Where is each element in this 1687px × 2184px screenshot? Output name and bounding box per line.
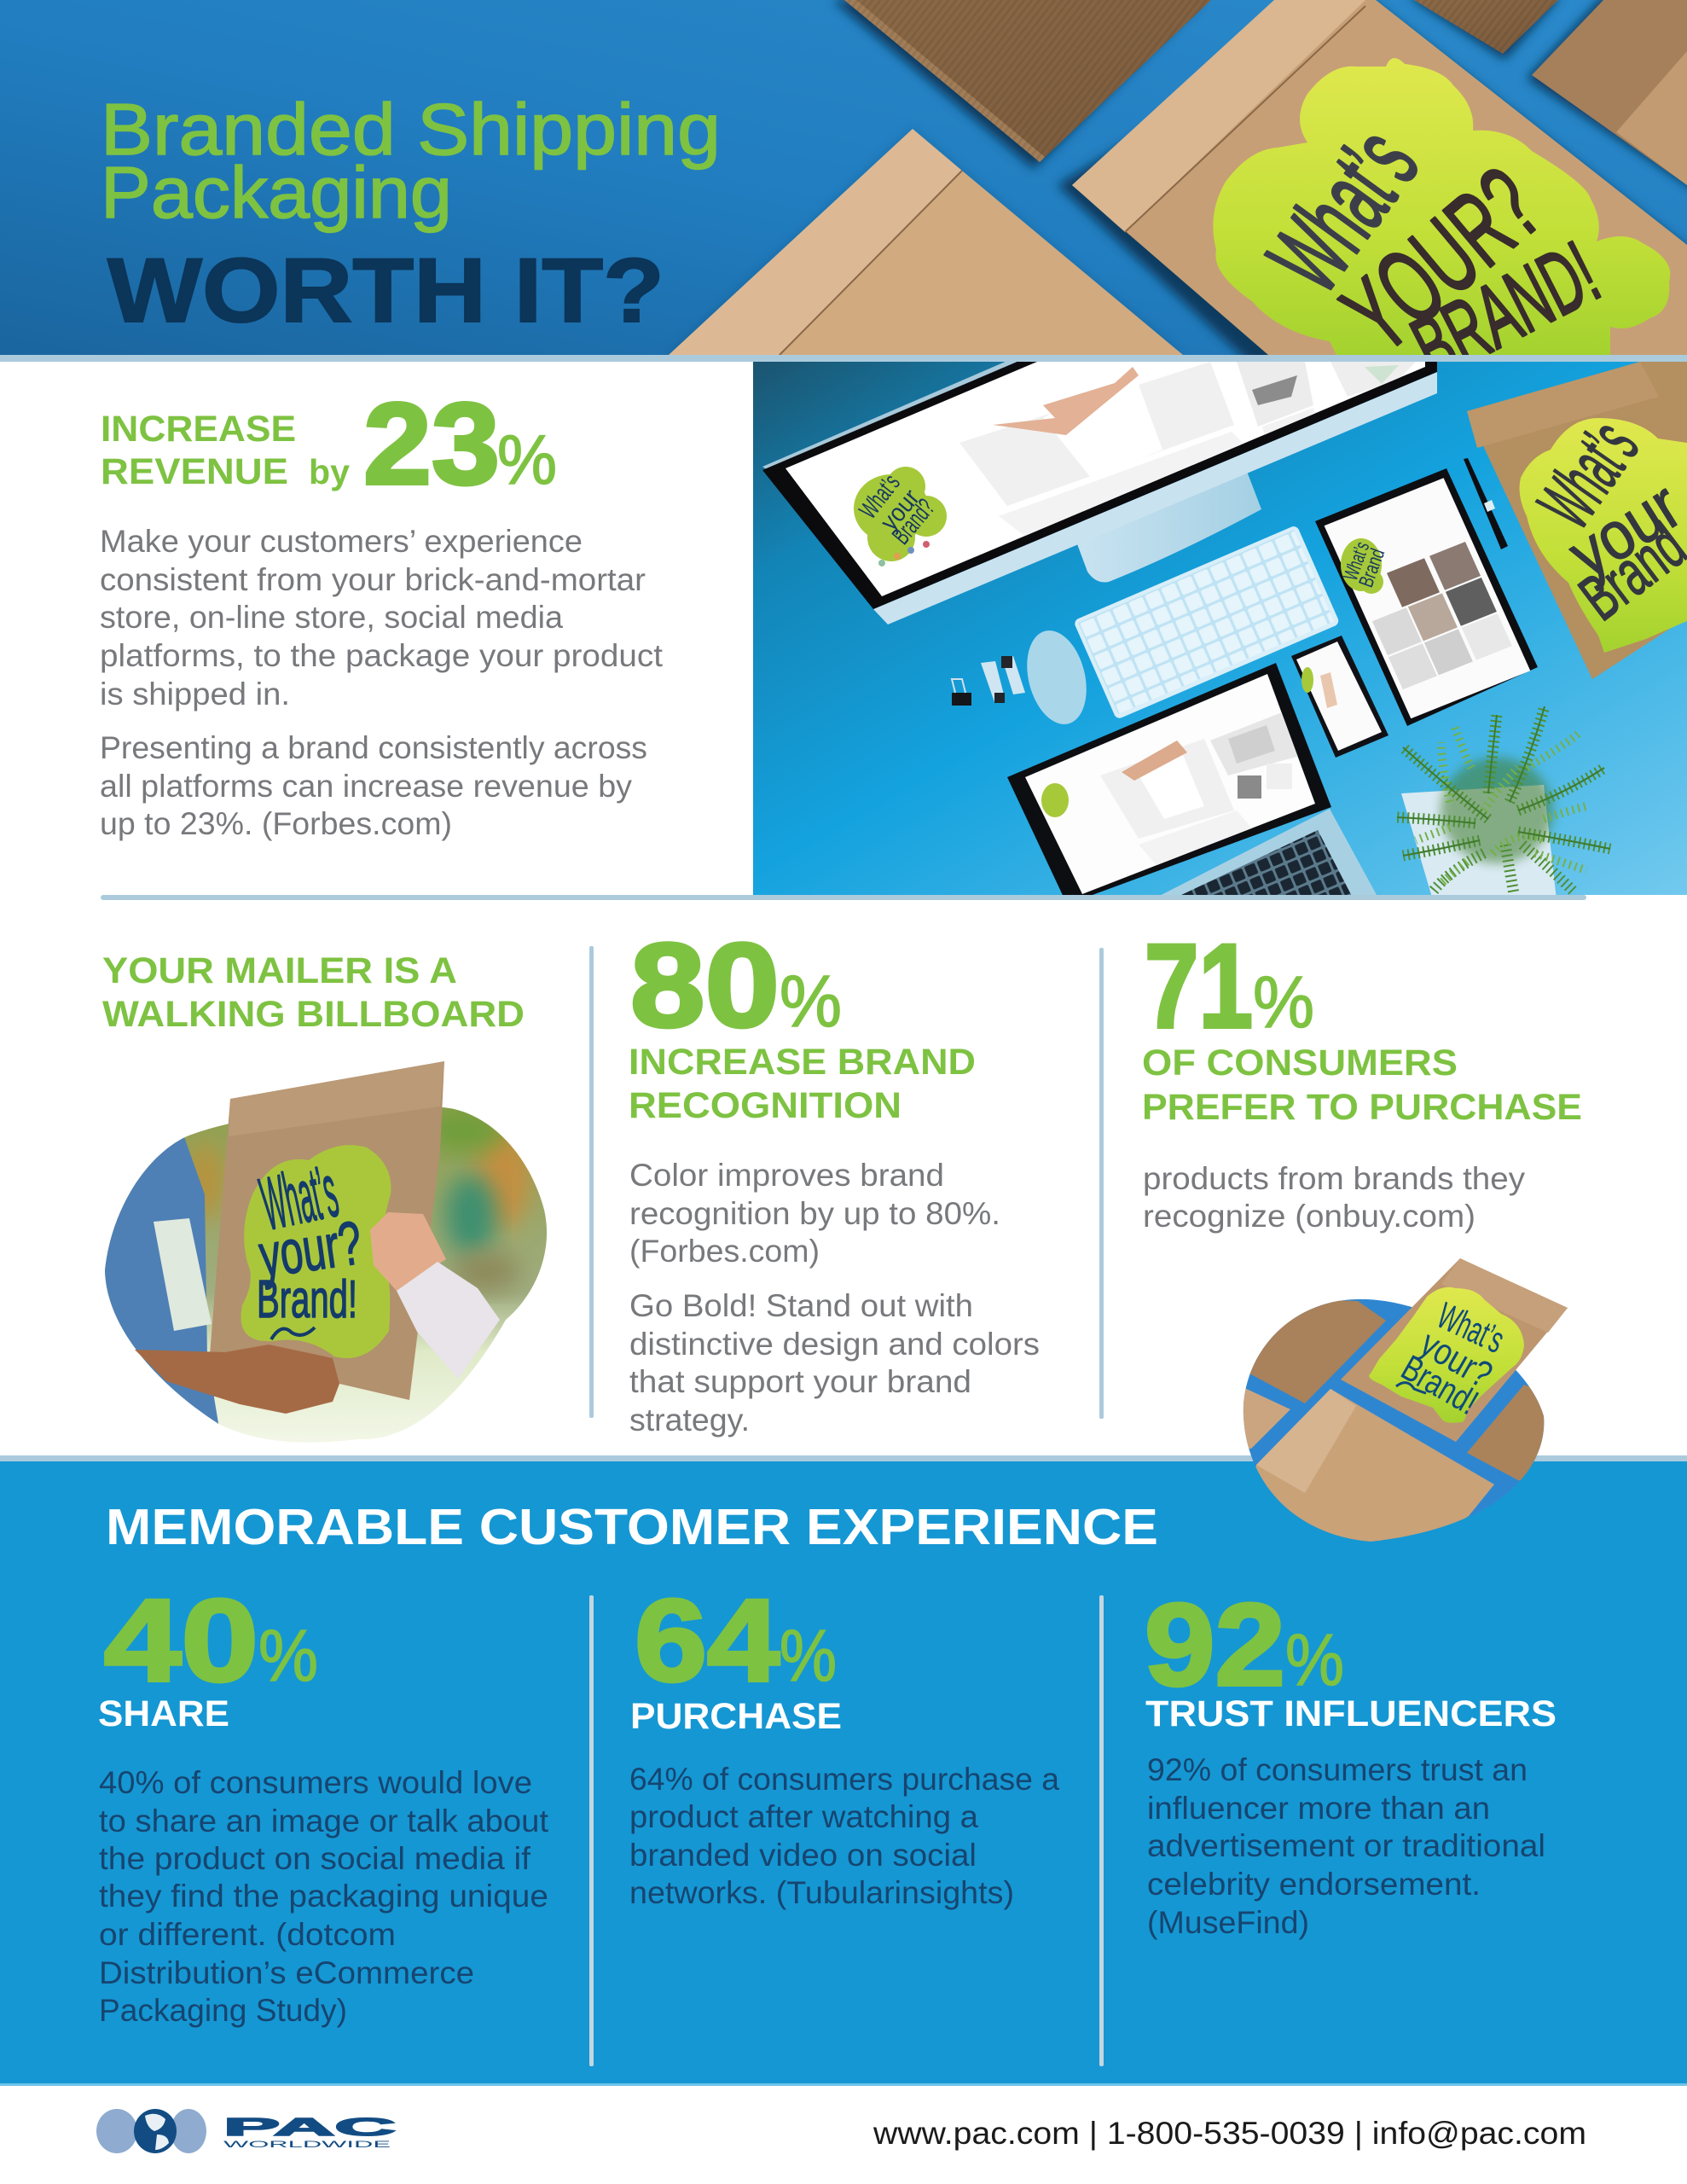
stat: 64% purchase: 64% of consumers purchase a <box>629 1762 1059 1797</box>
heading: increase revenue by 23%: 23 <box>363 379 500 508</box>
title: Branded Shipping Packaging <box>101 90 721 234</box>
stat: 80% brand recognition: that support your brand <box>629 1364 971 1399</box>
heading: memorable customer experience: MEMORABLE CUSTOMER EXPERIENCE <box>106 1499 1158 1555</box>
photo: devices on blue desk <box>753 361 1687 904</box>
icon: tablet <box>1315 468 1538 726</box>
stat: 64% purchase: 64 <box>635 1576 780 1706</box>
stat: 40% share: 40% of consumers would love <box>99 1765 532 1800</box>
stat: 80% brand recognition: recognition by up to 80%. <box>629 1196 1000 1231</box>
icon: lime brand blob with lettering <box>1213 58 1670 355</box>
icon: brand blob on mailer: What’s <box>253 1147 345 1246</box>
icon: small brand blob on monitor: Brand? <box>887 494 941 549</box>
heading: increase revenue by 23%: INCREASE <box>101 409 296 450</box>
text block: revenue copy: Presenting a brand consistently across <box>100 730 647 765</box>
heading: increase revenue by 23%: REVENUE <box>101 451 288 492</box>
icon: small brand blob on monitor: What’s <box>855 469 906 524</box>
stat: 64% purchase: branded video on social <box>629 1838 977 1873</box>
text block: revenue copy: consistent from your brick-and-mortar <box>100 562 646 597</box>
stat: 40% share: they find the packaging unique <box>99 1879 548 1914</box>
stat: 71% of consumers: 71 <box>1145 919 1253 1053</box>
text block: revenue copy: all platforms can increase revenue by <box>100 769 633 804</box>
stat: 80% brand recognition: distinctive design and colors <box>629 1327 1040 1362</box>
stat: 80% brand recognition: % <box>780 961 842 1043</box>
stat: 71% of consumers: % <box>1253 962 1314 1043</box>
divider <box>101 895 1586 900</box>
text block: revenue copy: store, on-line store, social media <box>100 600 563 635</box>
stat: 40% share <box>98 1576 549 2028</box>
heading: your mailer is a walking billboard: YOUR MAILER IS A <box>102 950 457 991</box>
icon: laptop <box>1007 663 1382 904</box>
column divider <box>1099 948 1104 1419</box>
stat: 80% brand recognition: INCREASE BRAND <box>629 1042 976 1083</box>
text block: revenue copy <box>100 524 664 841</box>
stat: 64% purchase: networks. (Tubularinsights) <box>629 1875 1014 1910</box>
icon: phone <box>1291 636 1388 758</box>
heading: increase revenue by 23% <box>101 379 557 508</box>
stat: 40% share: SHARE <box>98 1693 229 1734</box>
icon: small brand blob <box>1369 1287 1524 1423</box>
icon: keyboard <box>1073 525 1340 720</box>
icon: blob on tablet: Brand <box>1354 546 1389 590</box>
photo: mailers in blob <box>1244 1258 1568 1542</box>
text block: revenue copy: up to 23%. (Forbes.com) <box>100 806 452 841</box>
stat: 92% trust influencers: advertisement or traditional <box>1147 1828 1545 1863</box>
stat: 80% brand recognition: (Forbes.com) <box>629 1234 820 1269</box>
logo: PAC Worldwide: WORLDWIDE <box>223 2140 391 2150</box>
header banner with kraft mailers <box>0 0 1687 355</box>
icon: brand blob on mailer: Brand! <box>257 1270 357 1329</box>
icon: potted plant <box>1397 706 1610 900</box>
column divider <box>589 1595 594 2066</box>
icon: blob on tablet <box>1341 538 1385 594</box>
stat: 71% of consumers: recognize (onbuy.com) <box>1143 1199 1475 1234</box>
title: Branded Shipping Packaging: Packaging <box>101 153 452 234</box>
icon: small brand blob: your? <box>1413 1322 1499 1397</box>
stat: 92% trust influencers: influencer more than an <box>1147 1791 1490 1826</box>
stat: 40% share: 40 <box>104 1576 258 1706</box>
heading: increase revenue by 23%: by <box>309 452 350 491</box>
stat: 92% trust influencers: 92 <box>1145 1580 1285 1711</box>
stat: 40% share: to share an image or talk about <box>99 1804 549 1838</box>
stat: 80% brand recognition <box>629 918 1040 1438</box>
stat: 80% brand recognition: Go Bold! Stand out with <box>629 1288 973 1323</box>
text block: revenue copy: Make your customers’ experience <box>100 524 583 559</box>
icon: lime brand blob with lettering: YOUR? <box>1322 147 1562 375</box>
icon: brand blob on mailer: your? <box>255 1209 366 1291</box>
column divider <box>589 946 594 1418</box>
stat: 40% share: Packaging Study) <box>99 1993 347 2028</box>
text block: revenue copy: is shipped in. <box>100 677 290 712</box>
stat: 92% trust influencers: TRUST INFLUENCERS <box>1145 1693 1557 1734</box>
stat: 71% of consumers <box>1142 919 1582 1234</box>
photo: hand-off of branded mailer <box>85 1061 554 1450</box>
receiving hand and sleeve <box>370 1212 500 1379</box>
stat: 80% brand recognition: strategy. <box>629 1403 750 1438</box>
stat: 64% purchase <box>629 1576 1059 1910</box>
title: Worth it: WORTH IT? <box>107 239 664 341</box>
heading: your mailer is a walking billboard <box>102 950 525 1035</box>
logo: PAC Worldwide: PAC <box>223 2114 396 2141</box>
stat: 64% purchase: % <box>780 1616 837 1697</box>
icon: small brand blob: What’s <box>1431 1295 1510 1362</box>
footer contact line: www.pac.com | 1-800-535-0039 | info@pac.com <box>872 2116 1586 2151</box>
text block: revenue copy: platforms, to the package your product <box>100 638 664 673</box>
section band <box>0 1455 1687 1462</box>
stat: 71% of consumers: PREFER TO PURCHASE <box>1142 1087 1582 1128</box>
stat: 64% purchase: PURCHASE <box>630 1696 842 1737</box>
icon: pen <box>1464 458 1508 549</box>
icon: kraft mailer with blob <box>1467 362 1687 679</box>
panel: memorable customer experience <box>0 1461 1687 2086</box>
icon: monitor <box>762 361 1437 624</box>
stat: 92% trust influencers: 92% of consumers trust an <box>1147 1752 1528 1787</box>
stat: 80% brand recognition: 80 <box>630 918 780 1052</box>
column divider <box>1099 1595 1104 2066</box>
heading: increase revenue by 23%: % <box>497 421 557 499</box>
icon: mouse <box>1027 630 1087 724</box>
icon: brand blob on mailer <box>241 1145 391 1358</box>
stat: 40% share: Distribution’s eCommerce <box>99 1955 474 1990</box>
holding hand <box>135 1345 339 1414</box>
stat: 80% brand recognition: Color improves brand <box>629 1158 944 1193</box>
icon: small brand blob on monitor <box>854 467 947 561</box>
title: Branded Shipping Packaging: Branded Shipping <box>101 90 721 171</box>
colour dots <box>878 541 930 566</box>
stat: 92% trust influencers: % <box>1285 1620 1344 1701</box>
icon: small brand blob: Brand! <box>1395 1347 1485 1422</box>
stat: 92% trust influencers: (MuseFind) <box>1147 1905 1309 1940</box>
stat: 64% purchase: product after watching a <box>629 1799 978 1834</box>
stat: 71% of consumers: products from brands they <box>1143 1161 1526 1196</box>
icon: small brand blob on monitor: your <box>875 484 925 536</box>
divider band <box>0 355 1687 362</box>
icon: blob on tablet: What’s <box>1339 539 1374 584</box>
logo: PAC Worldwide <box>96 2109 396 2153</box>
stat: 40% share: or different. (dotcom <box>99 1917 396 1952</box>
stat: 40% share: % <box>258 1616 318 1697</box>
stat: 80% brand recognition: RECOGNITION <box>629 1085 901 1126</box>
stat: 40% share: the product on social media if <box>99 1841 531 1876</box>
stat: 71% of consumers: OF CONSUMERS <box>1142 1043 1458 1083</box>
icon: usb sticks and clip <box>952 656 1025 706</box>
stat: 92% trust influencers <box>1145 1580 1557 1940</box>
heading: your mailer is a walking billboard: WALKING BILLBOARD <box>102 994 525 1035</box>
stat: 92% trust influencers: celebrity endorsement. <box>1147 1867 1481 1902</box>
